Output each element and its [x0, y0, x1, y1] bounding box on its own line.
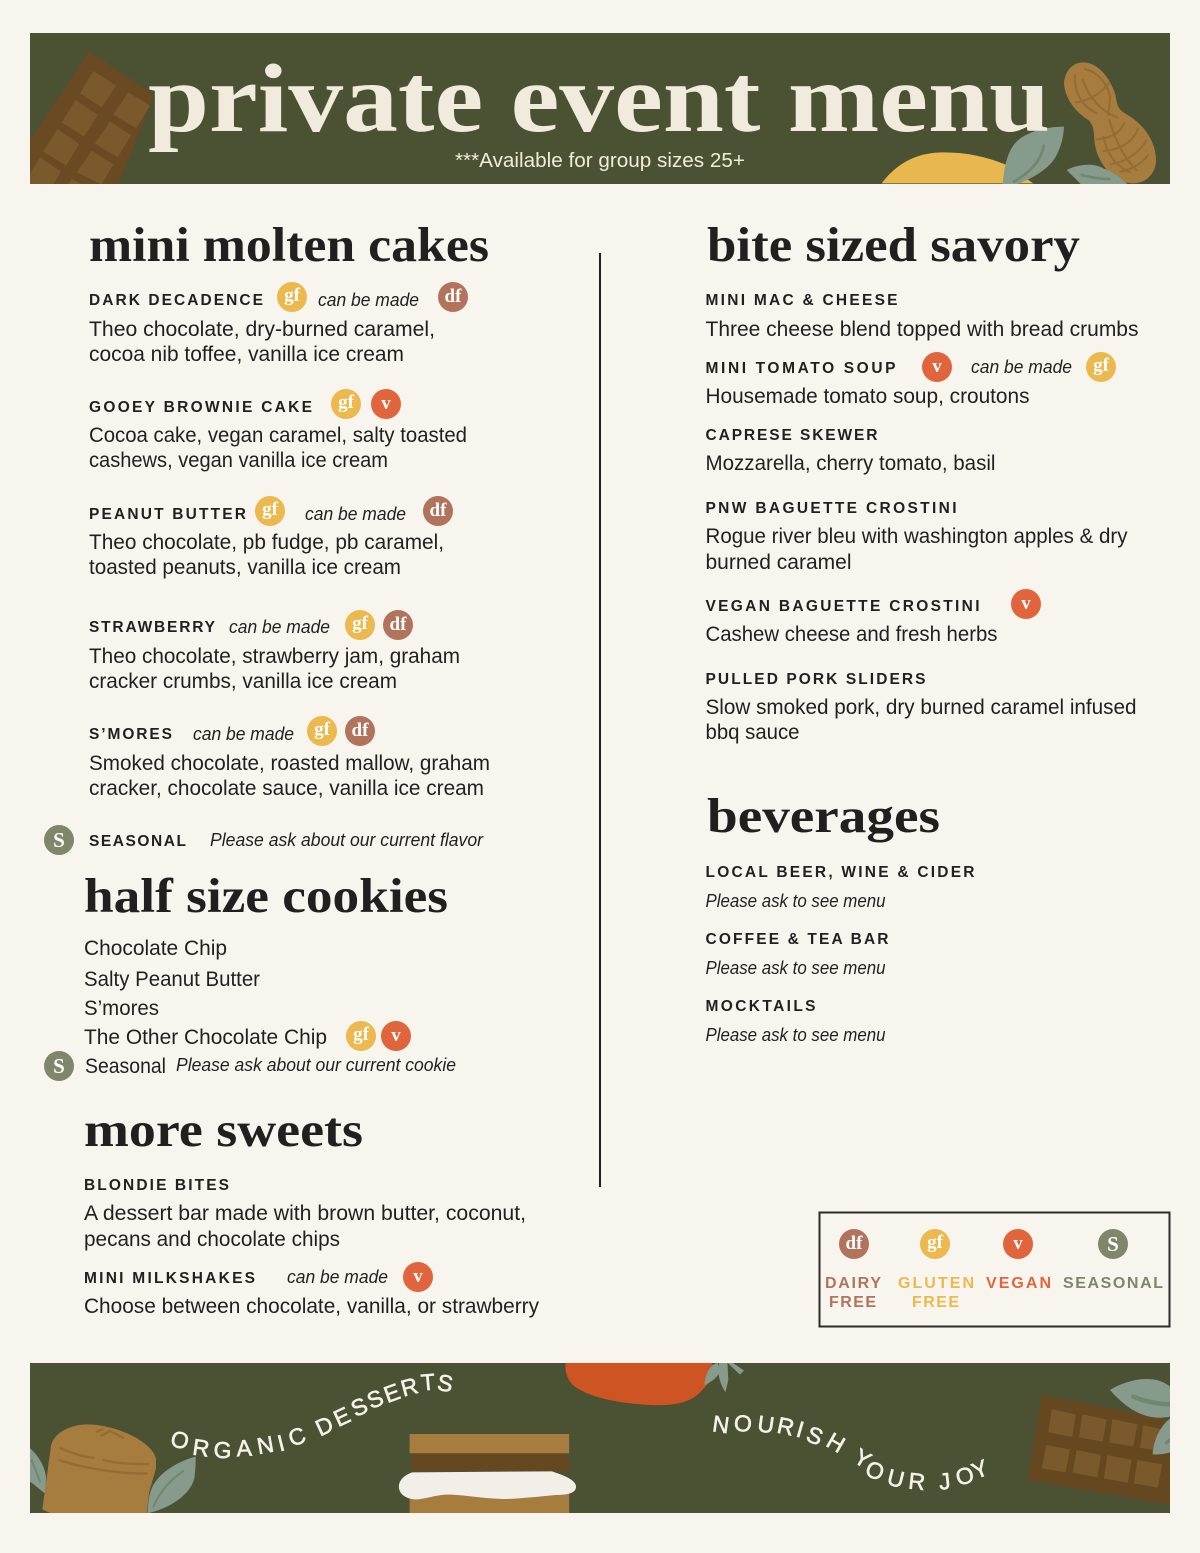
item: dark decadence: cocoa nib toffee, vanilla ice cream: [89, 343, 404, 366]
item: mini milkshakes: can be made: [287, 1267, 388, 1287]
item: seasonal cake: SEASONAL: [89, 833, 186, 850]
list: cookies: Seasonal: [85, 1055, 166, 1078]
legend: [820, 1212, 1170, 1326]
item: peanut butter: PEANUT BUTTER: [89, 506, 246, 523]
subtitle: ***Available for group sizes 25+: [455, 150, 745, 172]
item: mini milkshakes: Choose between chocolate, vanilla, or strawberry: [84, 1295, 539, 1318]
list: cookies: The Other Chocolate Chip: [84, 1026, 327, 1049]
legend: seasonal: SEASONAL: [1063, 1275, 1163, 1292]
item: coffee and tea bar: [706, 931, 888, 978]
item: vegan baguette crostini: v: [1021, 593, 1031, 614]
item: peanut butter: Theo chocolate, pb fudge, pb caramel,: [89, 531, 444, 554]
item: mini tomato soup: v: [932, 356, 942, 377]
icon: chocolate bar with leaves: [1027, 1379, 1170, 1505]
icon: s'more: [399, 1434, 576, 1513]
item: mocktails: MOCKTAILS: [706, 998, 816, 1015]
title: private event menu: [148, 45, 1050, 153]
item: s'mores: Smoked chocolate, roasted mallow, graham: [89, 752, 490, 775]
list: cookies: Salty Peanut Butter: [84, 968, 260, 991]
icon: leaves beside muffin: [30, 1448, 196, 1513]
heading: beverages: beverages: [707, 788, 940, 843]
icon: leaves: [1003, 127, 1128, 185]
item: strawberry: Theo chocolate, strawberry jam, graham: [89, 645, 460, 668]
item: gooey brownie cake: [89, 389, 467, 472]
item: mini milkshakes: [84, 1262, 539, 1318]
list: cookies: v: [391, 1025, 401, 1046]
item: dark decadence: can be made: [318, 290, 419, 310]
legend: dairy free: FREE: [829, 1294, 876, 1311]
item: peanut butter: df: [430, 500, 447, 521]
item: s'mores: S’MORES: [89, 726, 172, 743]
legend: dairy free: [825, 1229, 881, 1311]
item: mocktails: [706, 998, 886, 1045]
legend: gluten free: GLUTEN: [898, 1275, 974, 1292]
item: pulled pork sliders: PULLED PORK SLIDERS: [706, 671, 926, 688]
list: cookies: gf: [353, 1024, 370, 1045]
list: cookies: Chocolate Chip: [84, 937, 227, 960]
item: s'mores: cracker, chocolate sauce, vanilla ice cream: [89, 777, 484, 800]
legend: vegan: VEGAN: [986, 1275, 1051, 1292]
item: mini milkshakes: MINI MILKSHAKES: [84, 1270, 255, 1287]
curved text: nourish your joy: NOURISH YOUR JOY: [711, 1410, 992, 1495]
legend: gluten free: [898, 1229, 974, 1311]
item: peanut butter: [89, 496, 453, 579]
item: s'mores: [89, 716, 490, 800]
item: gooey brownie cake: gf: [338, 392, 355, 413]
item: strawberry: gf: [352, 613, 369, 634]
item: pulled pork sliders: Slow smoked pork, dry burned caramel infused: [706, 696, 1136, 719]
item: mini tomato soup: Housemade tomato soup, croutons: [706, 385, 1030, 408]
icon: lemon: [882, 152, 1033, 183]
item: caprese skewer: Mozzarella, cherry tomato, basil: [706, 452, 996, 475]
item: peanut butter: gf: [262, 499, 279, 520]
legend: dairy free: df: [846, 1233, 863, 1254]
item: dark decadence: DARK DECADENCE: [89, 292, 263, 309]
item: mini mac and cheese: MINI MAC & CHEESE: [706, 292, 898, 309]
item: mini milkshakes: v: [413, 1266, 423, 1287]
heading: mini molten cakes: mini molten cakes: [89, 217, 489, 272]
legend: gluten free: FREE: [912, 1294, 959, 1311]
item: vegan baguette crostini: Cashew cheese and fresh herbs: [706, 623, 998, 646]
legend: vegan: v: [1013, 1233, 1023, 1254]
item: peanut butter: toasted peanuts, vanilla ice cream: [89, 556, 401, 579]
item: pnw baguette crostini: [706, 500, 1128, 574]
icon: peanut: [1064, 62, 1156, 183]
item: seasonal cake: Please ask about our current flavor: [210, 830, 484, 850]
item: vegan baguette crostini: [706, 589, 1041, 646]
item: pnw baguette crostini: burned caramel: [706, 551, 852, 574]
item: pnw baguette crostini: PNW BAGUETTE CROSTINI: [706, 500, 956, 517]
list: cookies: [44, 937, 456, 1081]
item: caprese skewer: [706, 427, 996, 475]
item: gooey brownie cake: GOOEY BROWNIE CAKE: [89, 399, 312, 416]
item: mini tomato soup: gf: [1093, 355, 1110, 376]
item: blondie bites: A dessert bar made with brown butter, coconut,: [84, 1202, 526, 1225]
item: s'mores: gf: [314, 719, 331, 740]
item: strawberry: [89, 610, 460, 693]
footer banner: [30, 1363, 1170, 1514]
item: mocktails: Please ask to see menu: [706, 1025, 886, 1045]
curved text: organic desserts: ORGANIC DESSERTS: [168, 1368, 455, 1463]
item: pulled pork sliders: bbq sauce: [706, 721, 800, 744]
legend: seasonal: S: [1107, 1232, 1119, 1256]
item: strawberry: df: [390, 614, 407, 635]
icon: chocolate bar: [30, 51, 154, 184]
legend: vegan: [986, 1229, 1051, 1292]
item: local beer wine cider: LOCAL BEER, WINE & CIDER: [706, 864, 974, 881]
item: gooey brownie cake: Cocoa cake, vegan caramel, salty toasted: [89, 424, 467, 447]
item: seasonal cake: S: [53, 828, 65, 852]
list: cookies: S: [53, 1054, 65, 1078]
heading: more sweets: more sweets: [84, 1102, 363, 1157]
item: blondie bites: [84, 1177, 526, 1251]
item: caprese skewer: CAPRESE SKEWER: [706, 427, 878, 444]
item: mini tomato soup: [706, 352, 1116, 408]
item: pulled pork sliders: [706, 671, 1136, 744]
list: cookies: S’mores: [84, 997, 159, 1020]
item: local beer wine cider: Please ask to see menu: [706, 891, 886, 911]
item: dark decadence: Theo chocolate, dry-burned caramel,: [89, 318, 435, 341]
item: mini mac and cheese: [706, 292, 1138, 341]
item: strawberry: STRAWBERRY: [89, 619, 216, 636]
item: pnw baguette crostini: Rogue river bleu with washington apples & dry: [706, 525, 1128, 548]
item: coffee and tea bar: COFFEE & TEA BAR: [706, 931, 888, 948]
item: s'mores: can be made: [193, 724, 294, 744]
item: mini mac and cheese: Three cheese blend topped with bread crumbs: [706, 318, 1138, 341]
item: dark decadence: gf: [284, 285, 301, 306]
item: coffee and tea bar: Please ask to see menu: [706, 958, 886, 978]
item: gooey brownie cake: v: [381, 393, 391, 414]
legend: dairy free: DAIRY: [825, 1275, 881, 1292]
icon: strawberry: [565, 1363, 744, 1405]
item: mini tomato soup: can be made: [971, 357, 1072, 377]
item: gooey brownie cake: cashews, vegan vanilla ice cream: [89, 449, 388, 472]
list: cookies: Please ask about our current cookie: [176, 1055, 456, 1075]
item: peanut butter: can be made: [305, 504, 406, 524]
item: seasonal cake: [44, 825, 484, 855]
legend: seasonal: [1063, 1229, 1163, 1292]
header banner: [30, 33, 1170, 185]
item: vegan baguette crostini: VEGAN BAGUETTE CROSTINI: [706, 598, 980, 615]
item: dark decadence: df: [445, 286, 462, 307]
item: blondie bites: BLONDIE BITES: [84, 1177, 229, 1194]
legend: gluten free: gf: [927, 1232, 944, 1253]
item: s'mores: df: [352, 720, 369, 741]
icon: muffin: [42, 1424, 156, 1514]
item: blondie bites: pecans and chocolate chips: [84, 1228, 340, 1251]
item: dark decadence: [89, 282, 468, 366]
item: strawberry: can be made: [229, 617, 330, 637]
heading: half size cookies: half size cookies: [84, 868, 448, 923]
item: strawberry: cracker crumbs, vanilla ice cream: [89, 670, 397, 693]
item: mini tomato soup: MINI TOMATO SOUP: [706, 360, 896, 377]
heading: bite sized savory: bite sized savory: [707, 217, 1081, 272]
item: local beer wine cider: [706, 864, 974, 911]
